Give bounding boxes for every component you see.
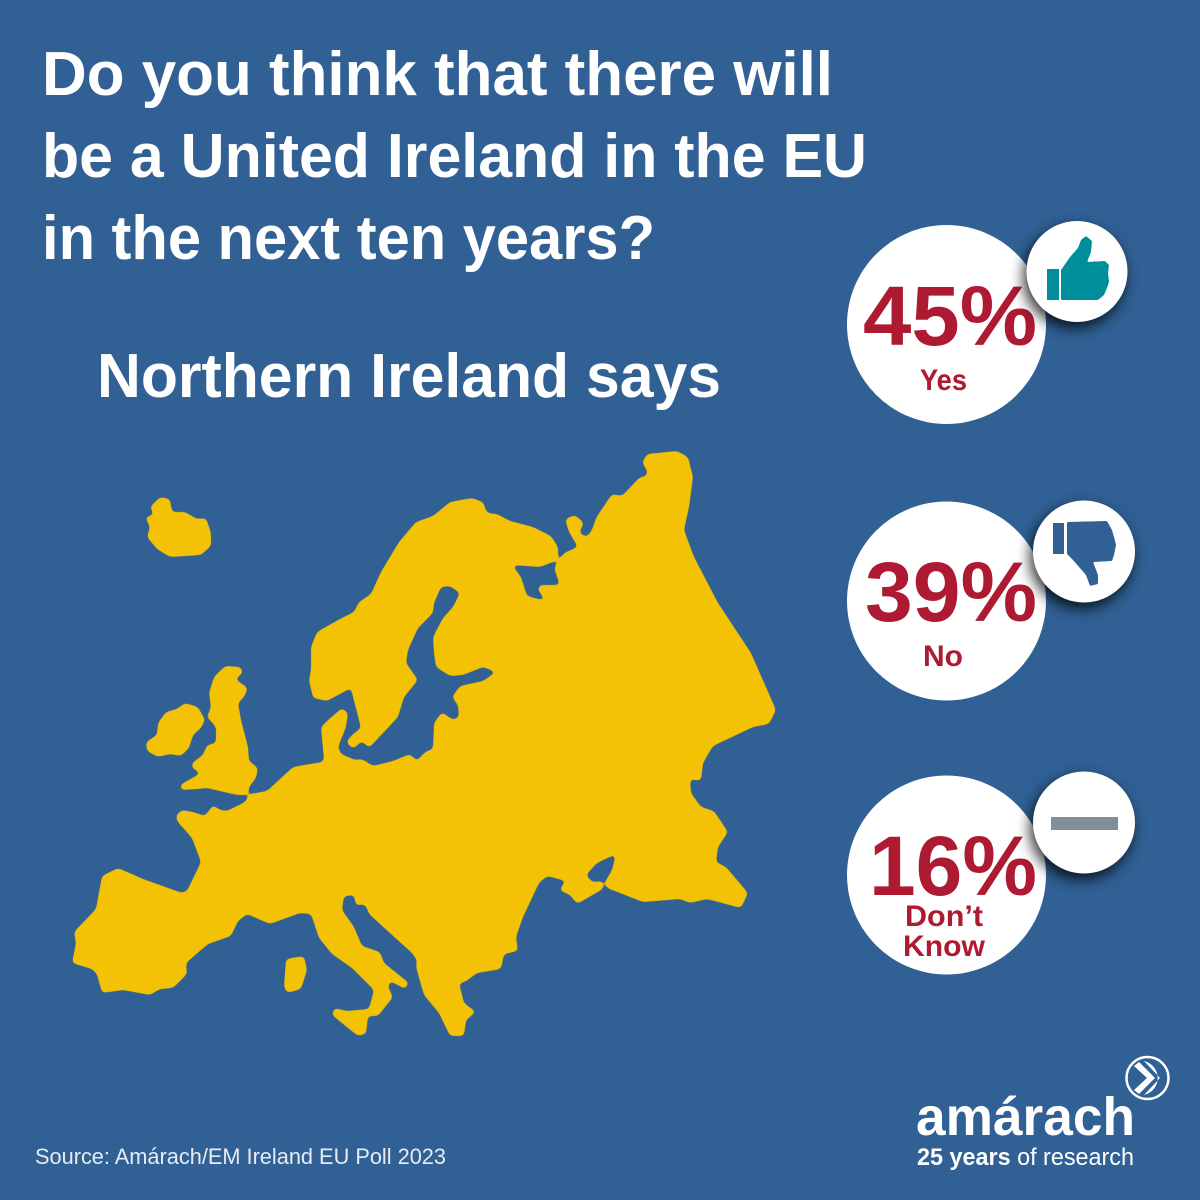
label: Don't Know [903,900,986,963]
stat: 45% Yes [847,221,1128,424]
title [42,40,867,273]
subtitle: Northern Ireland says: Northern Ireland says [97,342,721,411]
title: Do you think that there will [42,40,833,109]
title: be a United Ireland in the EU [42,122,867,191]
map: Ireland [146,703,205,757]
map of Europe [72,451,776,1036]
label: Yes: Yes [920,364,967,397]
label: Don't Know: Know [903,930,986,963]
value: 16%: 16% [869,819,1037,913]
label: Don't Know: Don’t [905,900,983,933]
source note: Source: Amárach/EM Ireland EU Poll 2023 [35,1144,446,1169]
map: Great Britain [180,666,258,795]
value: 45%: 45% [863,269,1037,363]
label: No: No [923,640,963,673]
circle: Yes [847,225,1046,424]
logo wordmark: amárach [916,1087,1135,1147]
value: 39%: 39% [865,545,1037,639]
title: in the next ten years? [42,204,655,273]
icon badge: thumbs up [1026,221,1128,322]
circle: Don't Know [847,776,1046,974]
map: mainland Europe [72,451,776,1036]
map: Corsica and Sardinia [284,956,307,993]
icon badge: thumbs down [1033,500,1135,602]
map: Iceland [145,497,211,557]
logo tagline: 25 years of research [917,1144,1134,1171]
logo icon: chevrons in circle [1126,1057,1168,1099]
stat: 16% Don't Know [847,772,1135,974]
icon badge: dash [1033,772,1135,874]
circle: No [847,502,1046,700]
stat: 39% No [847,500,1135,700]
logo: amarach [916,1057,1168,1171]
